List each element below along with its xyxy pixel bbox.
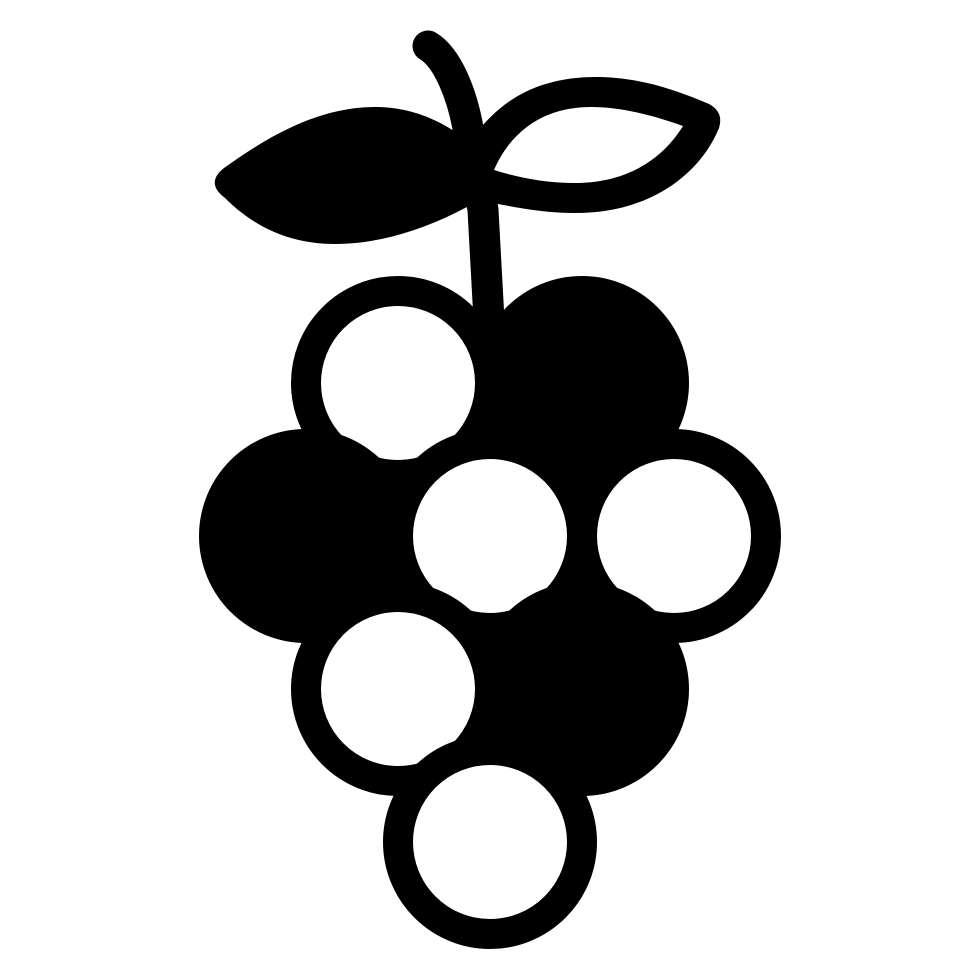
outlined grape: lower left	[306, 597, 490, 781]
filled left leaf	[215, 107, 489, 244]
filled grape: middle left	[199, 429, 413, 643]
filled grape: lower right	[475, 582, 689, 796]
outlined grape: middle right	[582, 444, 766, 628]
outlined right leaf	[479, 77, 720, 213]
outlined grape: top left	[306, 291, 490, 475]
grape cluster	[199, 276, 766, 934]
outlined grape: bottom	[398, 750, 582, 934]
outlined grape: center	[398, 444, 582, 628]
filled grape: top right	[475, 276, 689, 490]
stem	[428, 46, 489, 320]
